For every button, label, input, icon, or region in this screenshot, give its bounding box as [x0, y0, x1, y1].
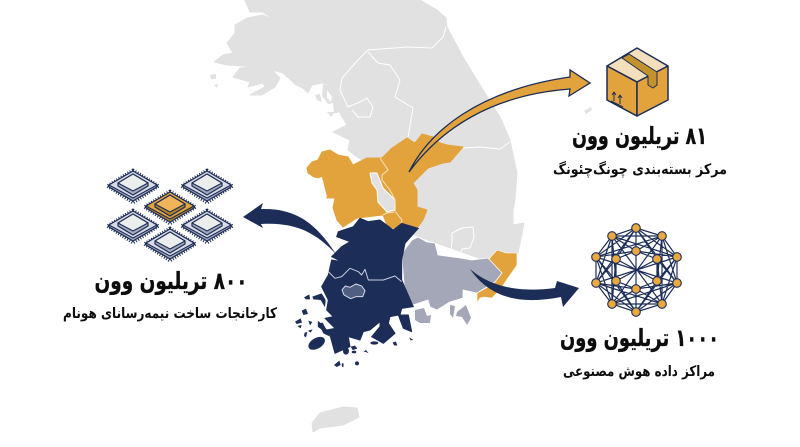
chip middle right: [181, 210, 233, 243]
map: Gwangju area: [342, 284, 365, 299]
map: navy Jeolla region: [295, 218, 418, 367]
icon: cardboard box: [607, 48, 668, 116]
map: Jeju island: [312, 407, 359, 432]
heading: 81 trillion won: ۸۱ تریلیون وون: [572, 122, 707, 150]
map of South Korea: [210, 0, 592, 432]
icon: semiconductor chips: [107, 170, 233, 261]
map: gray-blue Gyeongnam region: [402, 237, 502, 325]
map: gray regions: [210, 0, 592, 262]
caption: Honam semiconductor factories: کارخانجات ساخت نیمه‌رسانای هونام: [63, 306, 277, 322]
box this-way-up arrows: [611, 92, 623, 107]
map: gold Ulsan and Busan region: [477, 250, 517, 303]
arrow: navy arrow to AI data centers: [470, 269, 579, 307]
caption: Chungcheong packaging center: مرکز بسته‌بندی چونگ‌چئونگ: [553, 160, 727, 178]
map: navy islands: [295, 293, 413, 367]
map: gold Chungcheong region: [307, 134, 463, 229]
heading: 1000 trillion won: ۱۰۰۰ تریلیون وون: [560, 324, 719, 352]
chip bottom: [144, 228, 196, 261]
box right face: [637, 66, 668, 116]
box top face: [607, 48, 668, 82]
chip top left: [107, 170, 159, 203]
arrow: navy arrow to chip factories: [243, 203, 336, 254]
chip middle left: [107, 210, 159, 243]
chip top right: [181, 170, 233, 203]
box tape: [622, 54, 657, 88]
icon: neural network: [592, 224, 681, 316]
network nodes: [592, 224, 681, 316]
arrow: gold arrow to packaging center: [409, 70, 590, 172]
caption: AI data centers: مراکز داده هوش مصنوعی: [563, 364, 715, 380]
network links: [596, 228, 677, 312]
box left face: [607, 66, 637, 116]
chip center gold: [144, 191, 196, 224]
heading: 800 trillion won: ۸۰۰ تریلیون وون: [94, 267, 247, 295]
